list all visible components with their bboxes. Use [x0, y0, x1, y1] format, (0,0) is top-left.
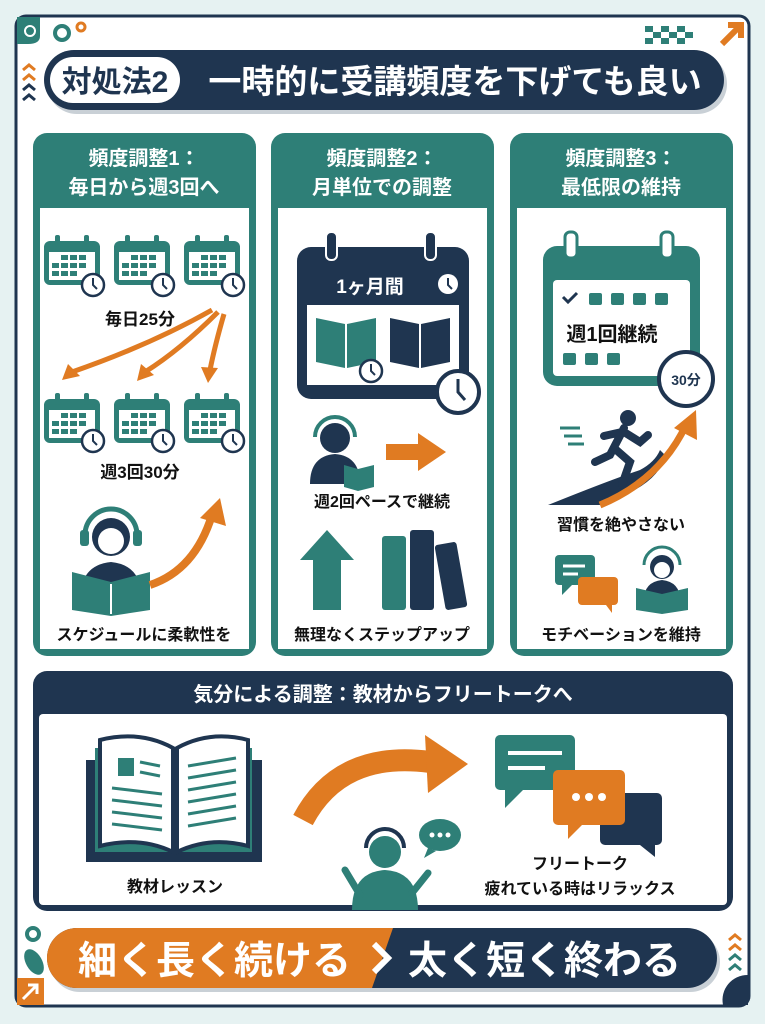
bottom panel: 教材レッスン [127, 877, 223, 896]
panel 3: 最低限の維持 [561, 176, 681, 199]
panel 1: 毎日25分 [105, 310, 175, 329]
panel 2: 頻度調整2： [326, 147, 438, 170]
panel 2 [271, 133, 494, 656]
bottom corner decorations [17, 928, 748, 1005]
panel 2: 1ヶ月間 [336, 277, 404, 298]
panel 2: 無理なくステップアップ [294, 626, 470, 644]
panel 3: 頻度調整3： [565, 147, 677, 170]
panel 1: 頻度調整1： [88, 147, 200, 170]
panel 2: 月単位での調整 [312, 176, 452, 199]
panel 1: 毎日から週3回へ [68, 176, 220, 199]
panel 3 [510, 133, 733, 656]
panel 3: 週1回継続 [566, 323, 658, 346]
bottom banner: 細く長く続ける [78, 940, 351, 983]
bottom panel: フリートーク [532, 855, 628, 873]
panel 1 [33, 133, 256, 656]
title: 対処法2 [62, 66, 168, 99]
bottom panel: 気分による調整：教材からフリートークへ [193, 683, 573, 706]
title [44, 50, 727, 114]
panel 3: モチベーションを維持 [541, 626, 701, 644]
bottom banner [47, 928, 720, 992]
panel 1: スケジュールに柔軟性を [57, 625, 231, 644]
panel 2: 週2回ペースで継続 [314, 493, 450, 511]
title: 一時的に受講頻度を下げても良い [208, 63, 702, 100]
panel 3: 習慣を絶やさない [557, 515, 685, 534]
panel 3: 30分 [671, 372, 701, 388]
bottom panel: 疲れている時はリラックス [484, 880, 676, 898]
bottom panel [33, 671, 733, 911]
bottom banner: 太く短く終わる [408, 940, 681, 983]
panel 1: 週3回30分 [100, 463, 180, 482]
corner decorations [17, 17, 741, 100]
